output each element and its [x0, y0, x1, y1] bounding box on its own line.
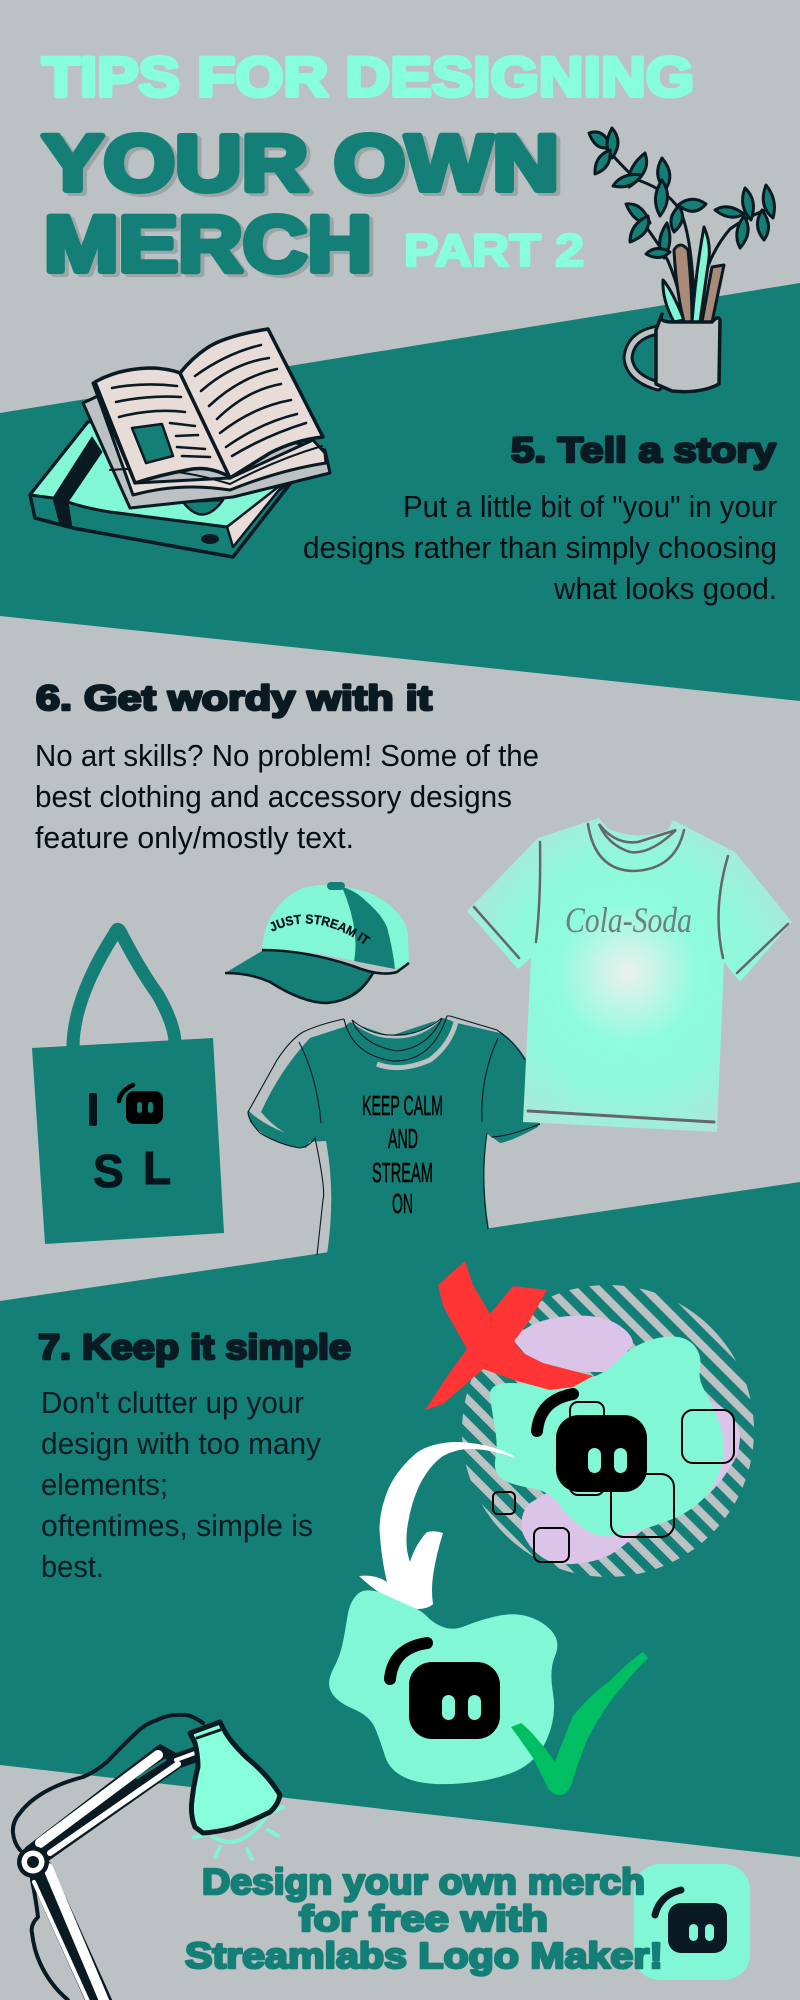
- icon: cluttered logo: [462, 1285, 754, 1577]
- icon: plant and pens in mug: [589, 128, 774, 392]
- text: tip 6 body: No art skills? No problem! Some of the: [35, 738, 539, 773]
- closed notebook: [30, 420, 293, 557]
- title: MERCH: [44, 199, 372, 288]
- shirt text: STREAM: [372, 1157, 433, 1188]
- title: YOUR OWN: [46, 121, 563, 210]
- text: tip 7 body: design with too many: [41, 1426, 321, 1461]
- icon: teal t-shirt: [248, 1016, 540, 1255]
- call to action text: [185, 1861, 663, 1976]
- left page: [95, 368, 230, 483]
- lamp light: [194, 1807, 283, 1859]
- shirt text: KEEP CALM: [362, 1090, 443, 1121]
- text: tip 7 body: best.: [41, 1549, 104, 1584]
- call to action text: Design your own merch: [202, 1861, 645, 1902]
- icon: baseball cap: JUST STREAM IT: [270, 914, 371, 944]
- icon: baseball cap: [225, 882, 410, 1004]
- icon: mint t-shirt: [467, 818, 792, 1132]
- text: tip 7 body: Don't clutter up your: [41, 1385, 304, 1420]
- arrow: from cluttered to simple logo: [359, 1442, 514, 1609]
- text: tip 5 body: what looks good.: [553, 571, 777, 606]
- call to action text: Streamlabs Logo Maker!: [185, 1935, 663, 1976]
- icon: open book on closed notebook: [30, 329, 330, 557]
- panel: teal band tip 7: [0, 1182, 800, 1857]
- heading: tip 5: 5. Tell a story: [511, 431, 777, 470]
- panel: teal band tip 5: [0, 283, 800, 701]
- icon: Streamlabs logo badge: [634, 1864, 750, 1980]
- call to action text: for free with: [299, 1898, 548, 1939]
- icon: tote bag: S: [93, 1145, 124, 1197]
- icon: tote logo: [119, 1085, 163, 1124]
- icon: tote bag: L: [143, 1142, 171, 1194]
- text: tip 5 body: Put a little bit of "you" in your: [403, 489, 777, 524]
- icon: mint t-shirt: Cola-Soda: [565, 900, 692, 940]
- title: TIPS FOR DESIGNING: [42, 45, 694, 108]
- shirt text: [362, 1090, 443, 1219]
- text: tip 5 body: designs rather than simply choosing: [303, 530, 777, 565]
- lamp upper arm: [26, 1745, 197, 1860]
- title: MERCH: [48, 202, 376, 291]
- collar gray ring: [377, 1022, 456, 1068]
- title: [42, 45, 694, 291]
- icon: simplified logo: [329, 1590, 557, 1784]
- title: YOUR OWN: [42, 118, 559, 207]
- heading: tip 6: 6. Get wordy with it: [36, 679, 432, 718]
- icon: desk lamp: [13, 1715, 283, 2000]
- book picture: [132, 424, 173, 463]
- text: tip 6 body: best clothing and accessory designs: [35, 779, 512, 814]
- text: tip 6 body: feature only/mostly text.: [35, 820, 354, 855]
- shirt text: ON: [392, 1188, 413, 1219]
- title: PART 2: [404, 225, 584, 276]
- text: tip 7 body: [41, 1385, 321, 1584]
- heading: tip 7: 7. Keep it simple: [38, 1328, 351, 1367]
- text: tip 5 body: [303, 489, 777, 606]
- icon: green check mark: [511, 1652, 648, 1795]
- shirt text: AND: [388, 1123, 418, 1154]
- lamp lower arm: [34, 1868, 108, 2000]
- right page: [180, 329, 323, 478]
- text: tip 7 body: oftentimes, simple is: [41, 1508, 313, 1543]
- icon: red X: [425, 1261, 593, 1410]
- icon: tote bag: [32, 929, 224, 1244]
- text: tip 6 body: [35, 738, 539, 855]
- text: tip 7 body: elements;: [41, 1467, 168, 1502]
